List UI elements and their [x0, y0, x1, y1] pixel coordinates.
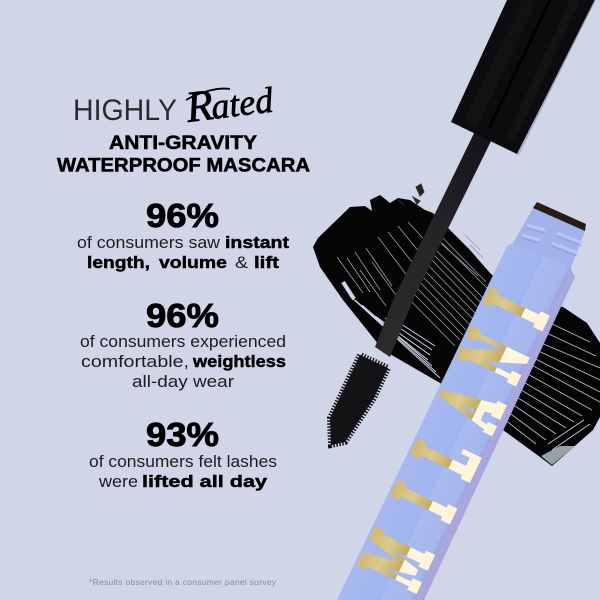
- stat 2: [80, 297, 286, 391]
- tube logo: I: [468, 280, 566, 340]
- tube body: [337, 243, 575, 600]
- stat 1 description: length,: [87, 253, 150, 272]
- stat 2 description: [80, 332, 286, 391]
- stat 2 description: of consumers experienced: [80, 332, 286, 351]
- stat 2 number: 96%: [146, 297, 219, 334]
- tube neck and threads: [513, 202, 586, 270]
- stat 1 description: volume: [159, 253, 227, 272]
- stat 3 description: of consumers felt lashes: [89, 452, 277, 471]
- tube logo: N: [442, 319, 548, 395]
- title: highly: HIGHLY: [73, 94, 177, 127]
- stat 2 description: all-day wear: [132, 372, 234, 391]
- tube logo: M: [343, 519, 452, 600]
- tube logo: I: [376, 473, 474, 533]
- wand stem: [375, 125, 494, 357]
- tube logo: L: [396, 423, 498, 491]
- stat 3 description: [89, 452, 277, 491]
- mascara tube: [337, 202, 586, 600]
- stat 1 description: lift: [254, 253, 279, 272]
- title: anti-gravity: ANTI-GRAVITY: [109, 133, 257, 154]
- stat 1 description: of consumers saw: [77, 233, 221, 252]
- stat 3: [89, 416, 277, 491]
- stat 1 description: [77, 233, 289, 272]
- stat 1 description: instant: [225, 233, 289, 252]
- stat 3 number: 93%: [146, 416, 219, 453]
- title: rated script: Rated: [182, 73, 276, 132]
- mascara cap: [451, 0, 595, 155]
- stat 1: [77, 197, 289, 272]
- mascara swatch: [313, 184, 600, 466]
- stat 3 description: were: [98, 472, 138, 491]
- stat 2 description: comfortable,: [81, 352, 189, 371]
- stat 2 description: weightless: [192, 352, 286, 371]
- wand brush: [330, 355, 388, 445]
- stat 1 number: 96%: [146, 197, 219, 234]
- footnote: *Results observed in a consumer panel survey: [89, 577, 277, 587]
- title: waterproof mascara: WATERPROOF MASCARA: [57, 156, 310, 176]
- title: [57, 73, 310, 176]
- mascara wand: [330, 125, 494, 445]
- stat 1 description: &: [235, 253, 249, 272]
- tube logo: A: [419, 371, 523, 443]
- stat 3 description: lifted all day: [142, 472, 268, 491]
